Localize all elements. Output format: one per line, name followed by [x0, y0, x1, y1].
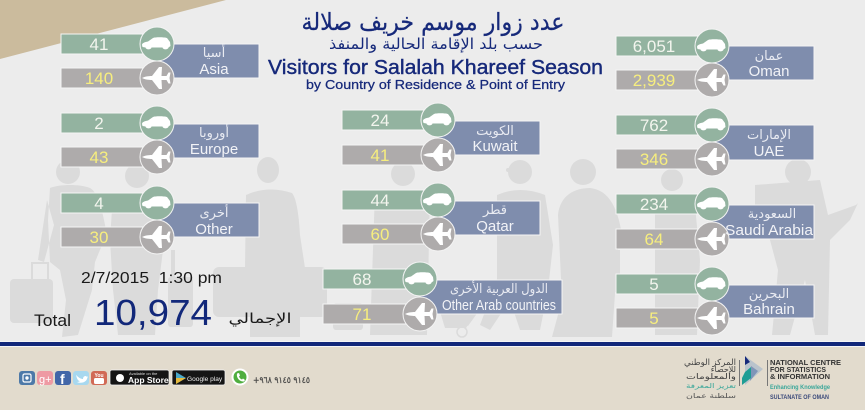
panel: Asia: 140: [85, 69, 113, 88]
badge: Google Play: Google play: [187, 376, 223, 383]
subtitle: English: by Country of Residence & Point of Entry: [306, 77, 566, 92]
phone number: +٩٦٨ ٩١٤٥ ٩١٤٥: [253, 376, 310, 386]
total value: 10,974: [94, 292, 212, 333]
logo: English name: [770, 358, 841, 401]
panel: Qatar: 60: [371, 225, 389, 244]
panel: Asia: [61, 27, 259, 95]
panel: UAE: 346: [640, 150, 668, 169]
logo: English name: SULTANATE OF OMAN: [770, 395, 829, 401]
badge: Google Play: [172, 370, 225, 385]
panel: UAE: [616, 108, 814, 176]
panel: UAE: الإمارات: [747, 128, 791, 143]
panel: Kuwait: Kuwait: [472, 138, 518, 155]
logo: Arabic name: للإحصاء: [711, 365, 736, 375]
panel: UAE: UAE: [754, 143, 784, 160]
panel: Other Arab countries: Other Arab countries: [442, 297, 556, 314]
icon: whatsapp: [232, 368, 248, 386]
panel: Bahrain: Bahrain: [743, 301, 795, 318]
title: Arabic: عدد زوار موسم خريف صلالة: [302, 8, 564, 36]
panel: Other Arab countries: [323, 262, 562, 331]
logo: English name: FOR STATISTICS: [770, 365, 826, 374]
icon: youtube: [91, 371, 107, 385]
panel: Other: [61, 186, 259, 254]
logo: mark: [739, 356, 768, 386]
panel: Saudi Arabia: [616, 187, 814, 256]
logo: Arabic name: سلطنة عمان: [686, 393, 736, 400]
panel: Bahrain: البحرين: [749, 287, 789, 302]
panel: Oman: 6,051: [633, 37, 675, 56]
logo: Arabic name: المركز الوطني: [684, 357, 736, 367]
panel: Other Arab countries: الدول العربية الأخرى: [450, 280, 548, 297]
panel: Europe: Europe: [190, 141, 238, 158]
panel: Kuwait: 41: [371, 146, 389, 165]
panel: Bahrain: [616, 267, 814, 335]
logo: Arabic name: [684, 357, 736, 400]
icon: google plus: [37, 371, 53, 386]
panel: Other: 30: [90, 228, 108, 247]
panel: Qatar: [342, 183, 540, 251]
logo: English name: & INFORMATION: [770, 372, 830, 381]
panel: Europe: أوروبا: [199, 124, 229, 141]
icon: instagram: [19, 371, 35, 385]
panel: Oman: عمان: [755, 49, 783, 64]
background corner wedge: [0, 0, 226, 59]
panel: Other: أخرى: [200, 204, 228, 221]
total label: English: Total: [34, 311, 71, 330]
panel: Saudi Arabia: السعودية: [748, 207, 796, 222]
icon: facebook: f: [60, 371, 65, 387]
badge: App Store: App Store: [128, 375, 169, 385]
panel: Qatar: Qatar: [476, 218, 514, 235]
panel: Bahrain: 5: [649, 275, 659, 294]
panel: Europe: 43: [90, 148, 108, 167]
panel: Qatar: 44: [371, 191, 389, 210]
panel: Oman: Oman: [749, 63, 789, 80]
logo: Arabic name: والمعلومات: [686, 372, 736, 381]
panel: Asia: أسيا: [203, 44, 225, 61]
panel: Qatar: قطر: [482, 203, 507, 218]
background traveller silhouettes: [10, 157, 858, 337]
footer: [0, 341, 865, 410]
logo: English name: NATIONAL CENTRE: [770, 358, 841, 367]
panel: Other Arab countries: 71: [353, 305, 371, 324]
icon: google plus: g+: [39, 374, 52, 386]
panel: Saudi Arabia: 64: [645, 230, 663, 249]
panel: Saudi Arabia: Saudi Arabia: [725, 222, 814, 239]
icon: youtube: You: [94, 373, 104, 379]
panel: Asia: 41: [90, 35, 108, 54]
panel: Asia: Asia: [199, 61, 229, 78]
badge: App Store: [110, 370, 169, 385]
panel: Kuwait: 24: [371, 111, 389, 130]
badge: App Store: Available on the: [129, 371, 158, 376]
panel: Other Arab countries: 68: [353, 270, 371, 289]
panel: UAE: 762: [640, 116, 668, 135]
title: English: Visitors for Salalah Khareef Season: [268, 57, 603, 79]
panel: Oman: 2,939: [633, 71, 675, 90]
panel: Saudi Arabia: 234: [640, 195, 668, 214]
panel: Other: Other: [195, 221, 233, 238]
date and time stamp: 2/7/2015 1:30 pm: [81, 270, 222, 287]
icon: twitter: [73, 371, 89, 385]
icon: facebook: [55, 371, 71, 387]
panel: Other: 4: [94, 194, 104, 213]
panel: Kuwait: الكويت: [476, 124, 514, 139]
panel: Europe: 2: [94, 114, 104, 133]
total label: Arabic: الإجمالي: [228, 311, 292, 327]
panel: Europe: [61, 106, 259, 174]
logo: English name: Enhancing Knowledge: [770, 384, 830, 391]
panel: Bahrain: 5: [649, 309, 659, 328]
title block: [268, 8, 603, 92]
panel: Kuwait: [342, 103, 540, 172]
subtitle: Arabic: حسب بلد الإقامة الحالية والمنفذ: [329, 35, 543, 53]
logo: Arabic name: تعزيز المعرفة: [686, 383, 736, 390]
panel: Oman: [616, 29, 814, 97]
